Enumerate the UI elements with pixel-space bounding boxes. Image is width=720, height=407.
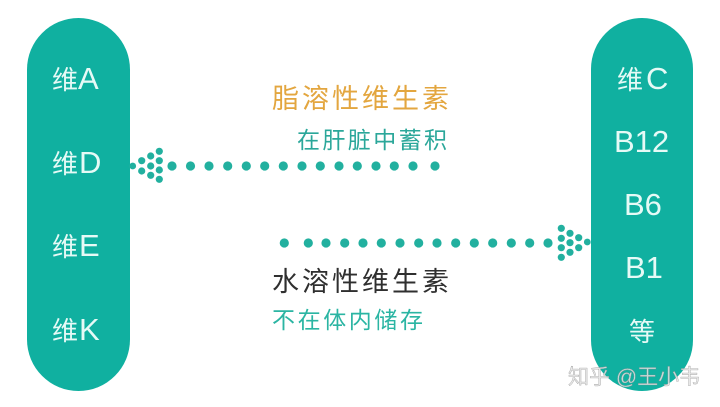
label: vitamin A: A: [78, 61, 99, 96]
label: vitamin C: 维: [617, 65, 643, 95]
label: vitamin E: E: [79, 228, 100, 263]
label: vitamin C: C: [646, 61, 668, 96]
label: B6: B6: [624, 187, 662, 222]
arrow: to fat-soluble panel: [129, 148, 440, 183]
label: vitamin E: 维: [52, 232, 78, 262]
label: vitamin A: 维: [52, 65, 78, 95]
panel: water-soluble vitamins: [591, 18, 693, 391]
text: not stored in body: 不在体内储存: [272, 307, 423, 333]
text: stored in liver: 在肝脏中蓄积: [297, 127, 447, 153]
watermark: 知乎 @王小韦: [568, 366, 700, 389]
label: vitamin D: 维: [52, 149, 78, 179]
arrow: to water-soluble panel: [280, 225, 591, 261]
label: vitamin K: 维: [52, 316, 78, 346]
label: B12: B12: [614, 124, 669, 159]
label: B1: B1: [625, 250, 663, 285]
label: etc: 等: [629, 317, 655, 347]
label: vitamin K: K: [79, 312, 100, 347]
heading: fat-soluble: 脂溶性维生素: [272, 84, 449, 114]
label: vitamin D: D: [79, 145, 101, 180]
panel: fat-soluble vitamins: [27, 18, 130, 391]
heading: water-soluble: 水溶性维生素: [272, 267, 449, 297]
